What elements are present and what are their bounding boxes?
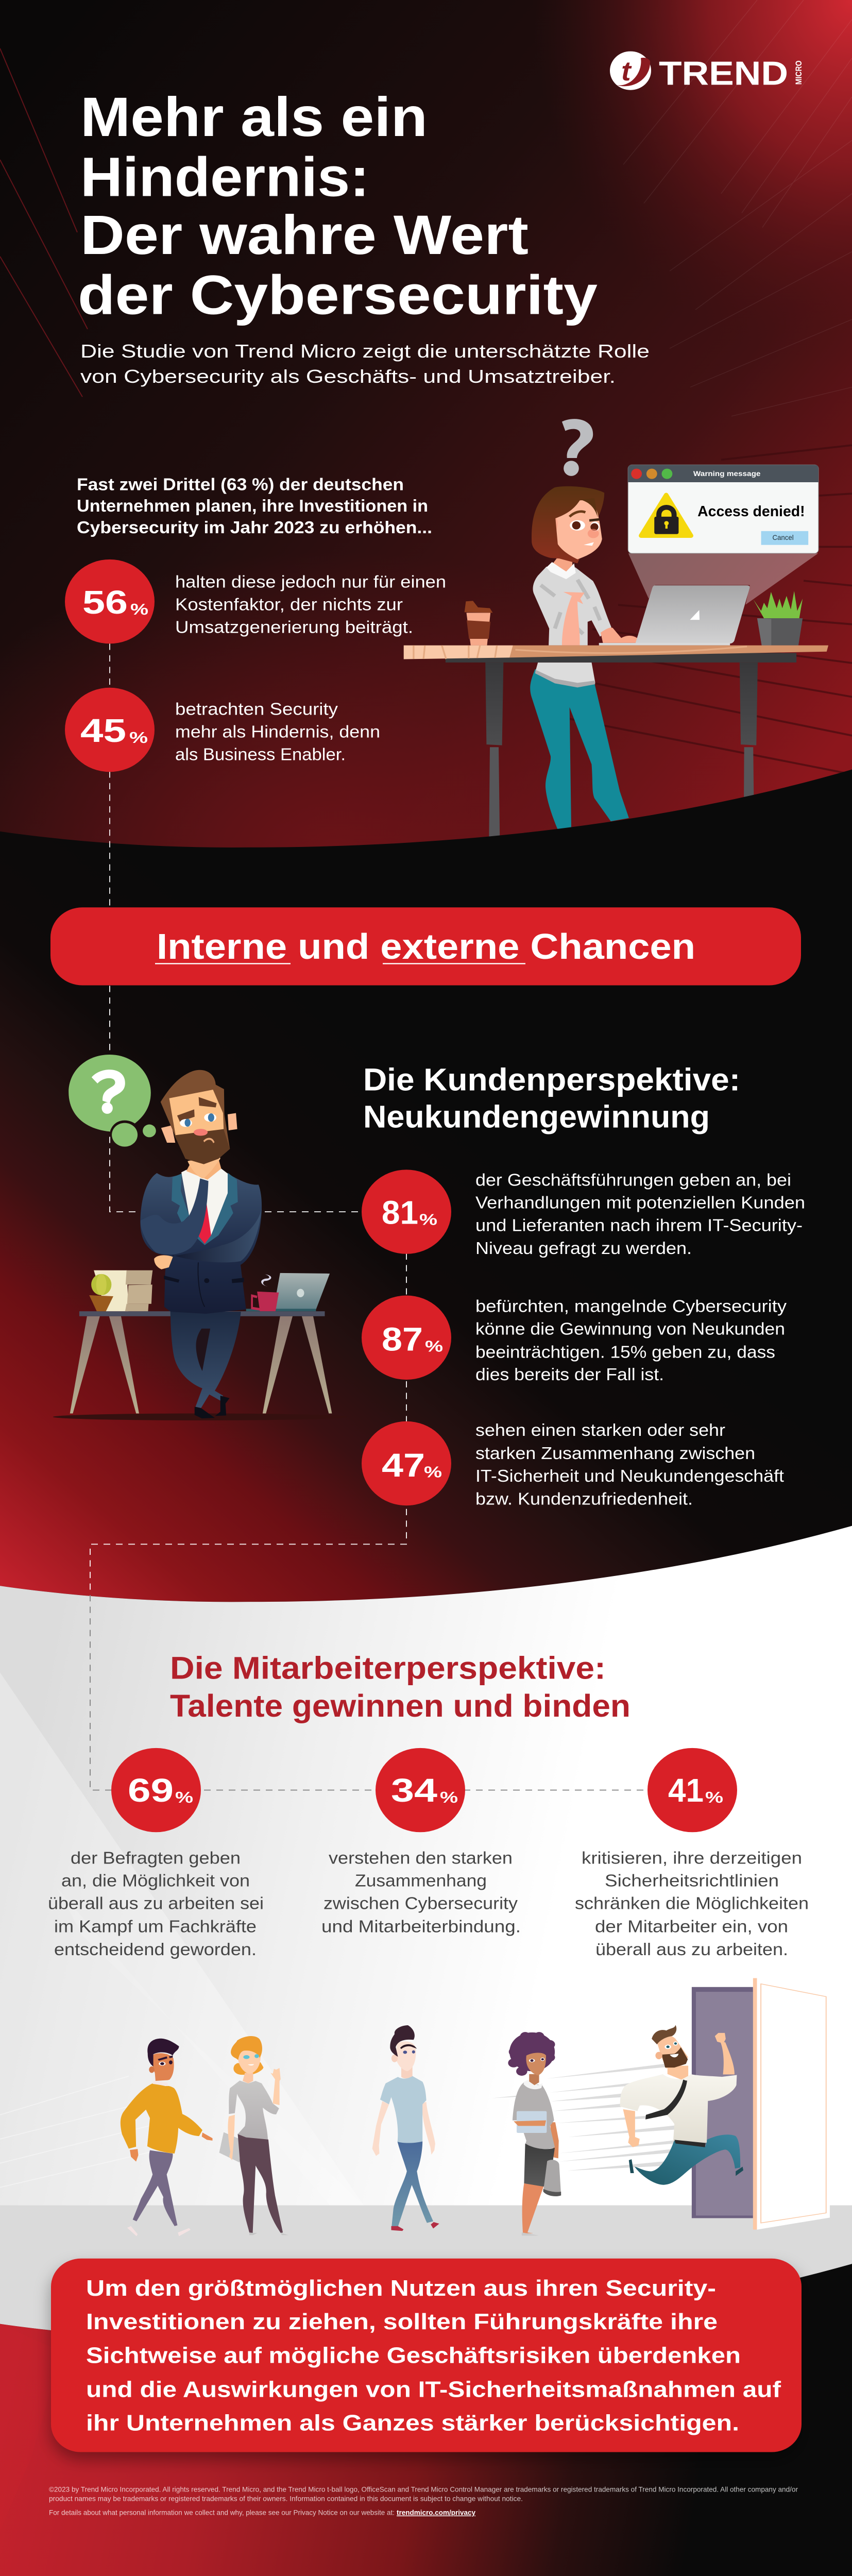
stat text: IT-Sicherheit und Neukundengeschäft	[475, 1467, 785, 1486]
callout: conclusion box	[51, 2259, 802, 2452]
logo: Trend Micro	[610, 52, 804, 92]
background: top red and black panel	[0, 0, 852, 871]
callout: conclusion box: Sichtweise auf mögliche Geschäftsrisiken überdenken	[86, 2344, 741, 2368]
callout: conclusion box: Um den größtmöglichen Nutzen aus ihren Security-	[86, 2276, 716, 2301]
stat text: kritisieren, ihre derzeitigen	[582, 1849, 802, 1868]
stat: 69 percent: %	[175, 1788, 193, 1806]
stat: 47 percent: %	[424, 1463, 442, 1481]
coffee cup	[465, 601, 492, 646]
stat text: der Befragten geben	[71, 1849, 241, 1868]
heading: Kundenperspektive: Neukundengewinnung	[363, 1099, 710, 1134]
standing desk	[404, 646, 828, 837]
stat text: Zusammenhang	[355, 1871, 487, 1890]
stat text: könne die Gewinnung von Neukunden	[475, 1320, 785, 1338]
light beam from laptop	[628, 553, 818, 605]
warning window: Warning message	[693, 470, 760, 478]
stat: 56 percent: 56	[82, 584, 128, 621]
stat text: der Mitarbeiter ein, von	[595, 1918, 788, 1936]
illustration: three walking employees	[121, 2025, 439, 2236]
stat text	[475, 1297, 787, 1384]
footer: legal text: For details about what personal information we collect and why, please see our Privacy Notice on our website at:	[49, 2509, 395, 2517]
stat text: der Geschäftsführungen geben an, bei	[475, 1171, 791, 1190]
stat: 81 percent	[362, 1170, 805, 1258]
icon: question mark	[562, 419, 593, 476]
stat text: und Lieferanten nach ihrem IT-Security-	[475, 1216, 803, 1235]
subtitle: von Cybersecurity als Geschäfts- und Umsatztreiber.	[80, 366, 616, 387]
callout: conclusion box: Investitionen zu ziehen, sollten Führungskräfte ihre	[86, 2310, 718, 2334]
stat text	[575, 1849, 809, 1959]
logo: Trend Micro: TREND	[659, 55, 788, 92]
stat text	[175, 572, 446, 637]
callout: conclusion box: ihr Unternehmen als Ganzes stärker berücksichtigen.	[86, 2411, 739, 2435]
illustration: thinking businessman at desk	[53, 1055, 347, 1420]
stat text: dies bereits der Fall ist.	[475, 1365, 664, 1384]
potted plant	[753, 591, 803, 646]
stat: 45 percent	[65, 688, 380, 772]
subtitle	[80, 341, 650, 387]
stat text: und Mitarbeiterbindung.	[321, 1918, 521, 1936]
stat text	[48, 1849, 264, 1959]
stat text: befürchten, mangelnde Cybersecurity	[475, 1297, 787, 1316]
stat text: halten diese jedoch nur für einen	[175, 572, 446, 591]
panel: red and black footer background	[0, 2264, 852, 2576]
stat: 41 percent: 41	[668, 1772, 704, 1809]
stat text: schränken die Möglichkeiten	[575, 1894, 809, 1913]
stat text: überall aus zu arbeiten sei	[48, 1894, 264, 1913]
stat: 69 percent	[48, 1748, 264, 1959]
stat text: Niveau gefragt zu werden.	[475, 1239, 692, 1258]
intro text: Cybersecurity im Jahr 2023 zu erhöhen...	[77, 518, 432, 537]
stat text	[321, 1849, 521, 1936]
intro text: Unternehmen planen, ihre Investitionen in	[77, 497, 428, 516]
warning window	[628, 465, 819, 553]
desk	[70, 1316, 332, 1413]
laptop	[599, 585, 749, 646]
stat: 45 percent: 45	[80, 712, 126, 749]
heading: Mitarbeiterperspektive: Talente gewinnen und binden	[170, 1689, 631, 1723]
stat: 34 percent	[321, 1748, 521, 1936]
heading: Kundenperspektive: Die Kundenperspektive:	[363, 1062, 740, 1097]
icon: warning triangle with padlock	[641, 495, 691, 536]
person: running man with beard	[620, 2025, 743, 2185]
stat text	[175, 700, 380, 764]
stat: 87 percent	[362, 1296, 787, 1384]
laptop and mug	[246, 1273, 330, 1311]
stat: 87 percent: 87	[382, 1321, 423, 1358]
footer: legal text: product names may be trademarks or registered trademarks of their owners. Information contained in this document is subject to change without notice.	[49, 2495, 523, 2503]
stat text: verstehen den starken	[329, 1849, 513, 1868]
stat text: sehen einen starken oder sehr	[475, 1421, 725, 1440]
woman figure	[530, 486, 639, 829]
stat: 41 percent	[575, 1748, 809, 1959]
heading: Kundenperspektive	[363, 1062, 740, 1134]
stat text: Kostenfaktor, der nichts zur	[175, 595, 403, 614]
title: Der wahre Wert	[80, 204, 529, 266]
stat: 47 percent	[362, 1421, 785, 1509]
person: woman with orange hair	[219, 2036, 288, 2235]
logo: Trend Micro: MICRO	[794, 60, 804, 84]
intro text	[77, 475, 432, 537]
stat text: betrachten Security	[175, 700, 338, 719]
stat text	[475, 1421, 785, 1509]
stat: 69 percent: 69	[128, 1772, 174, 1809]
stat text: Verhandlungen mit potenziellen Kunden	[475, 1193, 805, 1212]
stat: 47 percent: 47	[382, 1447, 425, 1483]
title: Hindernis:	[80, 146, 369, 208]
panel: dark middle section	[0, 770, 852, 1602]
banner: Interne und externe Chancen: Interne und externe Chancen	[157, 927, 695, 967]
stat text: überall aus zu arbeiten.	[595, 1940, 788, 1959]
warning window: Access denied!	[697, 503, 805, 520]
stat text: Umsatzgenerierung beiträgt.	[175, 618, 413, 637]
stat: 81 percent: 81	[382, 1194, 418, 1231]
stat: 87 percent: %	[425, 1337, 443, 1355]
logo: Trend Micro: t	[621, 56, 632, 87]
stat: 34 percent: 34	[391, 1772, 437, 1809]
stat: 41 percent: %	[705, 1788, 723, 1806]
connector lines: dashed path through sections	[90, 643, 692, 1790]
stat: 81 percent: %	[419, 1210, 437, 1228]
stat text: Sicherheitsrichtlinien	[605, 1871, 779, 1890]
intro text: Fast zwei Drittel (63 %) der deutschen	[77, 475, 404, 494]
stat text: als Business Enabler.	[175, 745, 346, 764]
warning window: Cancel	[773, 533, 794, 541]
person: man in yellow sweater	[121, 2039, 213, 2236]
banner: Interne und externe Chancen	[50, 907, 801, 985]
thought bubble with question mark	[69, 1055, 156, 1147]
floor shadow	[53, 1413, 347, 1420]
illustration: woman at desk with access denied warning	[404, 419, 828, 837]
footer: legal text	[49, 2486, 798, 2517]
paper stack and cactus	[89, 1270, 152, 1311]
stat text: starken Zusammenhang zwischen	[475, 1444, 755, 1463]
title	[78, 86, 598, 326]
motion lines	[492, 2064, 674, 2171]
panel: white employee section	[0, 1526, 852, 2340]
title: der Cybersecurity	[78, 264, 598, 326]
subtitle: Die Studie von Trend Micro zeigt die unterschätzte Rolle	[80, 341, 650, 362]
footer: legal text: trendmicro.com/privacy	[397, 2509, 476, 2517]
stat text: beeinträchtigen. 15% geben zu, dass	[475, 1343, 775, 1362]
stat: 56 percent: %	[130, 600, 148, 618]
stat text: an, die Möglichkeit von	[61, 1871, 250, 1890]
businessman figure	[140, 1070, 262, 1418]
stat text: mehr als Hindernis, denn	[175, 722, 380, 741]
person: man in blue t-shirt	[372, 2025, 439, 2231]
title: Mehr als ein	[80, 86, 428, 148]
stat: 56 percent	[65, 560, 446, 643]
stat: 34 percent: %	[440, 1788, 458, 1806]
stat text: im Kampf um Fachkräfte	[54, 1918, 257, 1936]
heading: Mitarbeiterperspektive: Die Mitarbeiterperspektive:	[170, 1651, 606, 1686]
stat text: zwischen Cybersecurity	[323, 1894, 518, 1913]
heading: Mitarbeiterperspektive	[170, 1651, 631, 1723]
stat text: bzw. Kundenzufriedenheit.	[475, 1489, 693, 1509]
stat text	[475, 1171, 805, 1258]
footer: legal text: ©2023 by Trend Micro Incorporated. All rights reserved. Trend Micro, and the Trend Micro t-ball logo, OfficeScan and Trend Micro Control Manager are trademarks or registered trademarks of Trend Micro Incorporated. All other company and/or	[49, 2486, 798, 2494]
stat text: entscheidend geworden.	[54, 1940, 257, 1959]
door	[692, 1978, 830, 2230]
person: woman with curly hair	[508, 2032, 561, 2235]
illustration: woman and man running through door	[492, 1978, 830, 2235]
stat: 45 percent: %	[129, 728, 148, 747]
callout: conclusion box: und die Auswirkungen von IT-Sicherheitsmaßnahmen auf	[86, 2378, 781, 2402]
